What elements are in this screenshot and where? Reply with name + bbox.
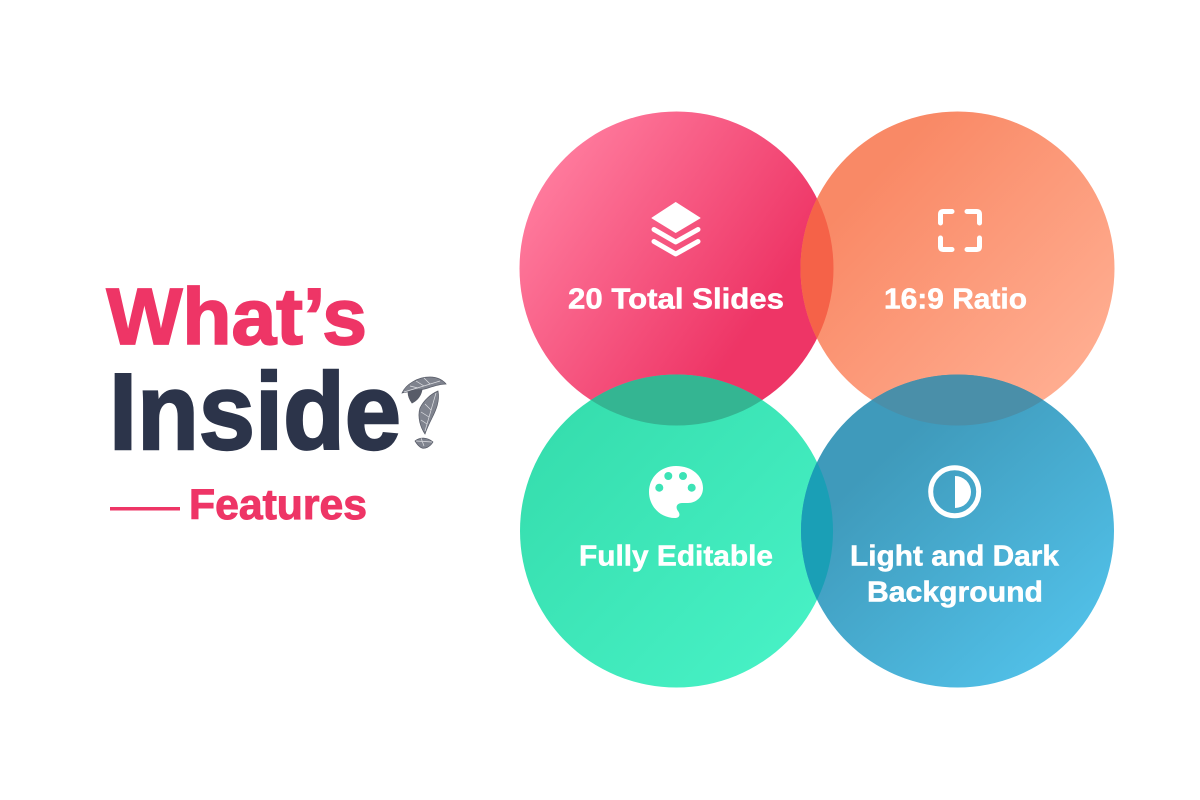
label: Light and Dark Background: Light and Dark <box>850 540 1059 572</box>
icon: light and dark contrast <box>931 468 979 516</box>
icon: frame ratio <box>940 212 980 250</box>
icon: palette <box>649 466 703 518</box>
subheading: Features: Features <box>189 481 367 529</box>
label: 16:9 Ratio: 16:9 Ratio <box>884 284 1027 316</box>
overlap: pink and orange <box>800 199 834 338</box>
panel: pink circle <box>520 112 834 426</box>
icon: layers <box>652 202 700 254</box>
label: 20 Total Slides: 20 Total Slides <box>568 284 784 316</box>
panel: orange circle <box>800 112 1114 426</box>
overlap: orange and blue <box>872 374 1043 426</box>
overlap: pink and green <box>591 374 762 426</box>
heading: What's: What’s <box>106 272 367 361</box>
label: Fully Editable: Fully Editable <box>579 540 773 572</box>
icon: leaf question mark <box>402 377 446 448</box>
panel: green circle <box>520 374 833 688</box>
divider line <box>110 507 180 510</box>
panel: blue circle <box>801 374 1114 688</box>
label: Light and Dark Background <box>850 540 1059 608</box>
heading: Inside: Inside <box>109 351 401 473</box>
label: Light and Dark Background: Background <box>867 576 1043 608</box>
infographic canvas <box>105 112 1114 688</box>
overlap: green and blue <box>801 462 833 600</box>
